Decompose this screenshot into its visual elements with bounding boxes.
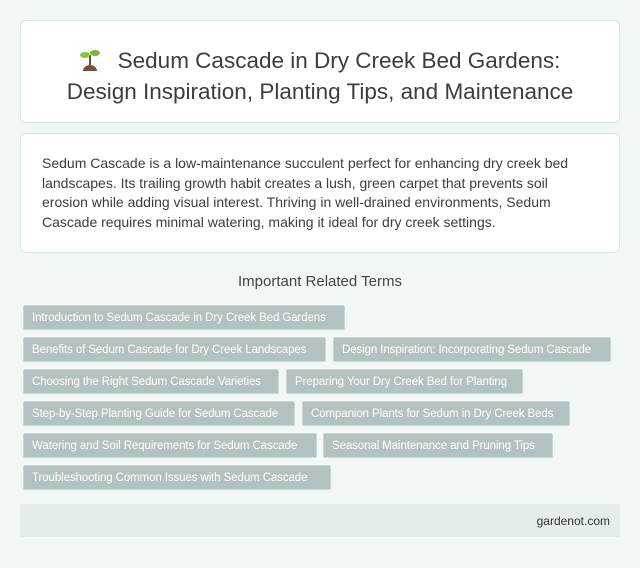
tag	[333, 337, 611, 362]
title: Design Inspiration, Planting Tips, and Maintenance	[67, 79, 573, 104]
tag	[302, 401, 570, 426]
footer	[20, 504, 620, 537]
title: Sedum Cascade in Dry Creek Bed Gardens:	[118, 48, 560, 73]
tag: Design Inspiration: Incorporating Sedum Cascade	[342, 344, 591, 356]
tag: Preparing Your Dry Creek Bed for Planting	[295, 376, 507, 388]
tag	[23, 337, 326, 362]
tag	[323, 433, 553, 458]
section heading: Important Related Terms	[238, 273, 402, 290]
tag	[23, 433, 317, 458]
description text: Sedum Cascade is a low-maintenance succulent perfect for enhancing dry creek bed landscapes. Its trailing growth habit creates a lush, green carpet that prevents soil erosion while adding visual interest. Thriving in well-drained environments, Sedum Cascade requires minimal watering, making it ideal for dry creek settings.	[42, 155, 568, 230]
tag: Companion Plants for Sedum in Dry Creek Beds	[311, 408, 553, 420]
tag: Choosing the Right Sedum Cascade Varieties	[32, 376, 261, 388]
title	[67, 48, 573, 104]
tag: Seasonal Maintenance and Pruning Tips	[332, 440, 535, 452]
tag	[23, 305, 345, 330]
tag: Watering and Soil Requirements for Sedum Cascade	[32, 440, 297, 452]
description card	[20, 133, 620, 253]
tag	[23, 401, 295, 426]
tag: Step-by-Step Planting Guide for Sedum Cascade	[32, 408, 278, 420]
tag	[23, 369, 279, 394]
footer source text: gardenot.com	[537, 514, 610, 528]
tag: Benefits of Sedum Cascade for Dry Creek Landscapes	[32, 344, 306, 356]
icon: seedling	[80, 50, 100, 71]
tag: Troubleshooting Common Issues with Sedum Cascade	[32, 472, 307, 484]
tag: Introduction to Sedum Cascade in Dry Creek Bed Gardens	[32, 312, 326, 324]
header card	[20, 20, 620, 123]
tag	[286, 369, 523, 394]
tag	[23, 465, 331, 490]
